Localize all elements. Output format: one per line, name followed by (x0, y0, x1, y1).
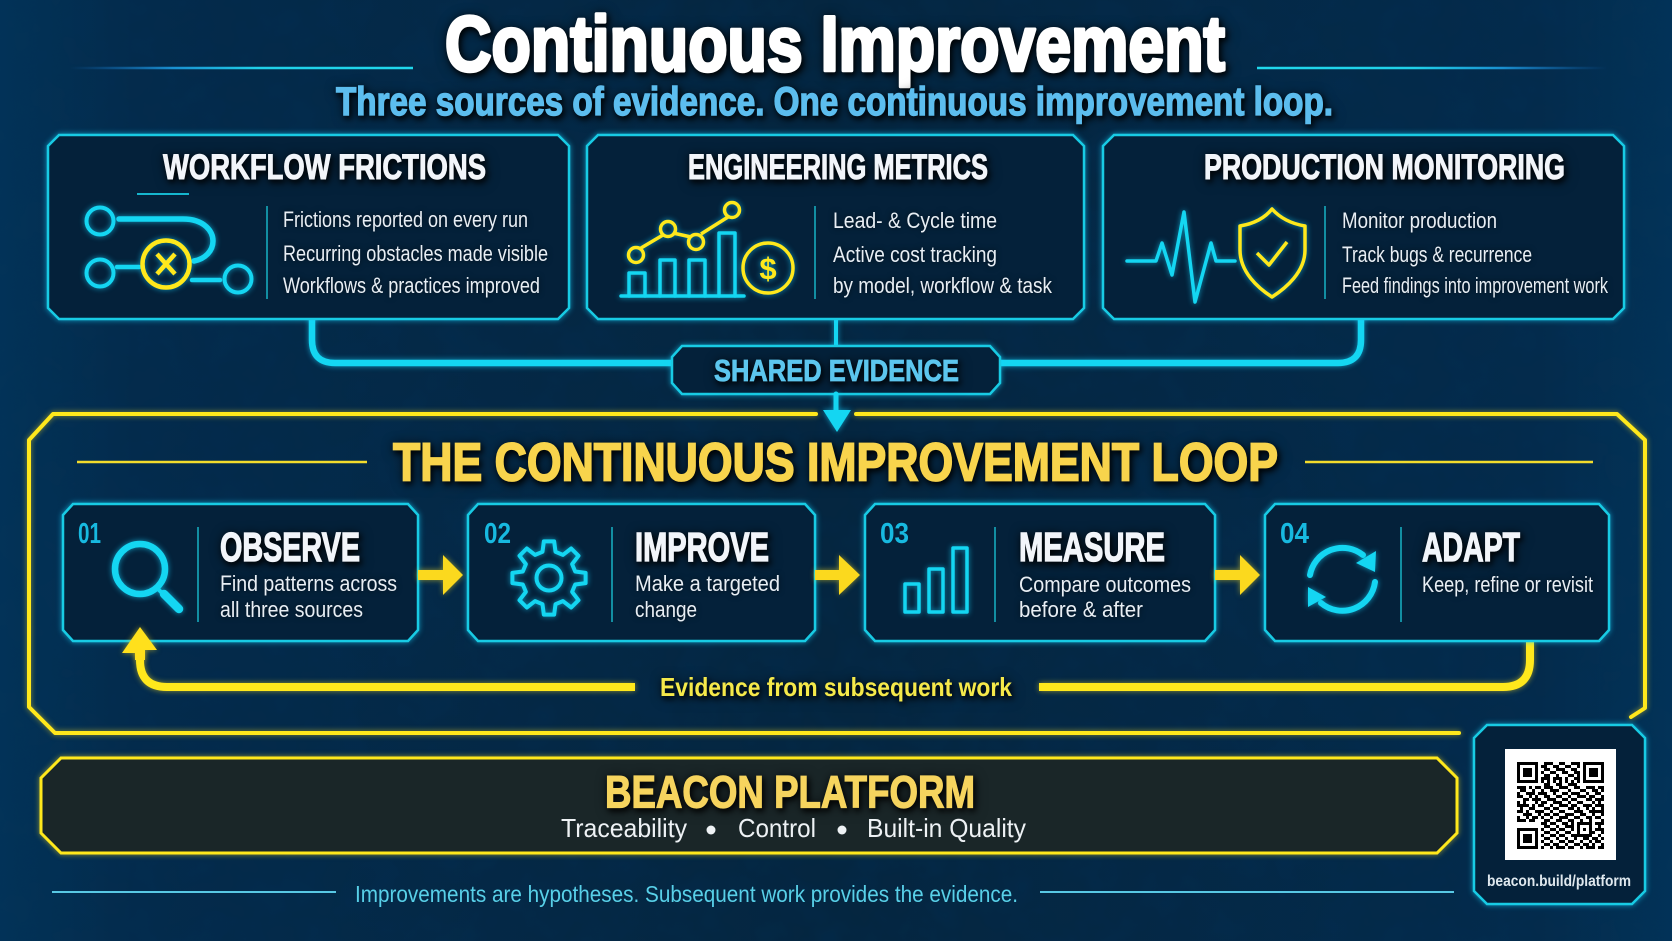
step text: adapt: Keep, refine or revisit (1422, 572, 1594, 597)
panel: loop frame (29, 414, 1645, 733)
arrow: improve to measure (815, 555, 860, 595)
text block: workflow frictions: Workflows & practices improved (283, 273, 540, 298)
text block: workflow frictions: Frictions reported on every run (283, 207, 528, 232)
step card: improve (468, 504, 815, 641)
icon: gear (512, 541, 586, 615)
text block: workflow frictions: Recurring obstacles made visible (283, 241, 548, 266)
arrowhead: feedback into observe (122, 627, 157, 660)
step number 01: 01 (78, 518, 101, 550)
divider (1324, 206, 1326, 299)
step number 03: 03 (880, 518, 909, 550)
text block: production monitoring: Monitor production (1342, 208, 1497, 233)
title: Continuous Improvement (445, 0, 1225, 88)
footer rule left (52, 891, 336, 893)
divider (611, 527, 613, 622)
step text: improve (635, 524, 780, 622)
heading: beacon platform: BEACON PLATFORM (605, 766, 975, 818)
step text: adapt (1422, 524, 1594, 597)
text block: engineering metrics: Active cost tracking (833, 242, 997, 267)
panel: beacon platform (41, 758, 1457, 853)
step card: adapt (1265, 504, 1609, 641)
platform qualities: Built-in Quality (867, 813, 1026, 843)
platform qualities: Traceability (561, 813, 687, 843)
title rule left (70, 67, 413, 69)
text block: engineering metrics (833, 208, 1053, 298)
step card: observe (63, 504, 418, 641)
step text: adapt: ADAPT (1422, 524, 1520, 570)
step text: measure: before & after (1019, 597, 1143, 622)
icon: rising bars (905, 548, 967, 612)
loop rule left (77, 461, 367, 463)
icon: bar chart with trend and coin: $ (759, 251, 777, 286)
panel: QR code (1474, 725, 1645, 904)
step text: observe: Find patterns across (220, 571, 397, 596)
step text: measure (1019, 524, 1191, 622)
text block: engineering metrics: by model, workflow & task (833, 273, 1053, 298)
feedback label: Evidence from subsequent work (660, 672, 1012, 702)
step card: measure (865, 504, 1215, 641)
platform qualities (561, 813, 1026, 843)
panel: engineering metrics (587, 135, 1084, 319)
heading: production monitoring: PRODUCTION MONITORING (1204, 148, 1565, 187)
text block: production monitoring (1342, 208, 1609, 298)
step number 02: 02 (484, 518, 511, 550)
icon: bar chart with trend and coin (621, 202, 793, 296)
divider (197, 527, 199, 622)
shared evidence badge: SHARED EVIDENCE (714, 354, 959, 388)
panel: workflow frictions (48, 135, 569, 319)
icon: workflow with blocked step (86, 208, 252, 292)
divider (266, 206, 268, 299)
icon: magnifier (115, 544, 179, 609)
loop heading: THE CONTINUOUS IMPROVEMENT LOOP (393, 432, 1278, 492)
step text: improve: Make a targeted (635, 571, 780, 596)
subtitle: Three sources of evidence. One continuous improvement loop. (336, 80, 1333, 124)
divider (1400, 527, 1402, 622)
footer rule right (1040, 891, 1454, 893)
heading: engineering metrics: ENGINEERING METRICS (688, 148, 988, 187)
short heading rule (137, 193, 189, 195)
arrow: measure to adapt (1215, 555, 1260, 595)
step text: measure: Compare outcomes (1019, 572, 1191, 597)
loop rule right (1305, 461, 1593, 463)
step text: measure: MEASURE (1019, 524, 1165, 570)
title rule right (1257, 67, 1607, 69)
QR background (1505, 749, 1616, 860)
text block: production monitoring: Track bugs & recurrence (1342, 242, 1532, 267)
heading: workflow frictions: WORKFLOW FRICTIONS (163, 148, 486, 187)
QR caption: beacon.build/platform (1487, 873, 1631, 890)
QR modules (1517, 764, 1604, 848)
arrow: observe to improve (418, 555, 463, 595)
icon: heartbeat and shield (1127, 209, 1305, 302)
icon: refresh arrows (1308, 548, 1376, 611)
connector: sources to shared evidence (312, 319, 1361, 363)
step number 04: 04 (1280, 518, 1309, 550)
text block: engineering metrics: Lead- & Cycle time (833, 208, 997, 233)
divider (994, 527, 996, 622)
platform qualities: Control (738, 813, 816, 843)
shared evidence badge (672, 346, 1000, 394)
panel: production monitoring (1103, 135, 1624, 319)
arrow: shared evidence to loop (823, 394, 851, 432)
step text: observe: OBSERVE (220, 524, 360, 570)
feedback line: evidence from subsequent work (140, 641, 1530, 687)
step text: observe: all three sources (220, 597, 363, 622)
step text: improve: IMPROVE (635, 524, 769, 570)
divider (814, 206, 816, 299)
step text: improve: change (635, 597, 697, 622)
text block: workflow frictions (283, 207, 548, 298)
footer note: Improvements are hypotheses. Subsequent work provides the evidence. (355, 881, 1018, 907)
step text: observe (220, 524, 397, 622)
